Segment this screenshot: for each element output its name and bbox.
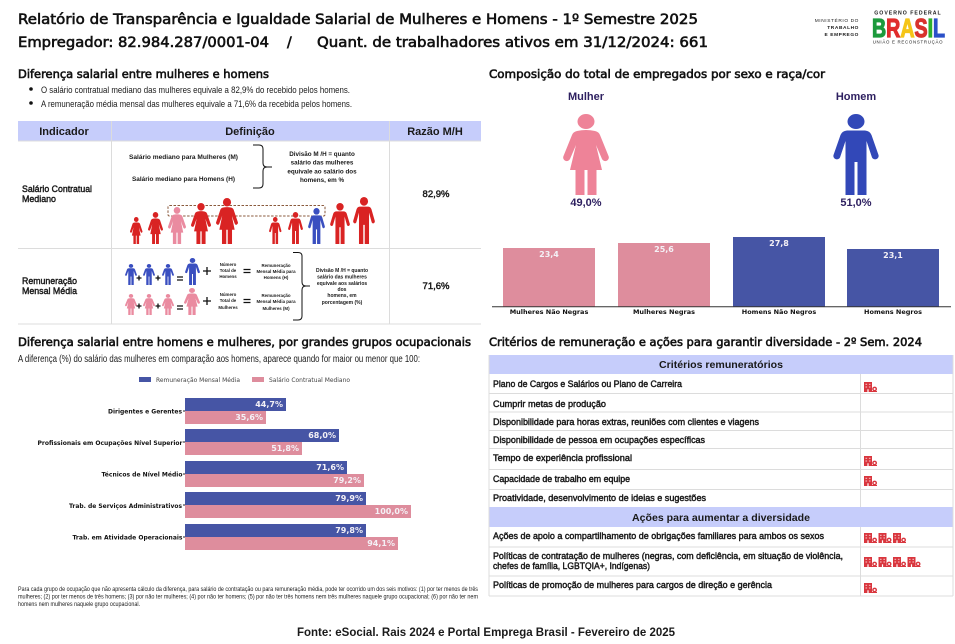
bar chart: grupos ocupacionais: [38, 398, 411, 550]
criteria rows: Proatividade, desenvolvimento de ideias e sugestões: [493, 493, 706, 503]
criteria rows: Cumprir metas de produção: [493, 399, 606, 409]
bar chart: grupos ocupacionais: 71,6%: [316, 463, 344, 472]
bar chart: sexo e raça: Mulheres Negras: [633, 308, 695, 316]
icon: homem 51,0%: [833, 91, 879, 209]
definition: remuneração homens: [125, 258, 296, 285]
definition: remuneração mulheres: [125, 288, 296, 315]
definition: divisão M/H: salário das mulheres: [317, 274, 367, 280]
title: Quant. de trabalhadores ativos em 31/12/2024: 661: [317, 35, 708, 51]
panel: composição: [489, 67, 951, 316]
heading: diferença salarial: Diferença salarial entre mulheres e homens: [18, 67, 269, 81]
heading: grupos ocupacionais: Diferença salarial entre homens e mulheres, por grandes grupos ocupacionais: [18, 335, 471, 349]
bar chart: grupos ocupacionais: 100,0%: [375, 507, 408, 516]
criteria rows: Disponibilidade de pessoa em ocupações específicas: [493, 435, 705, 445]
definition: salário mediano: salário das mulheres: [291, 160, 354, 166]
icon: homem 51,0%: Homem: [836, 91, 876, 103]
bar chart: grupos ocupacionais: Técnicos de Nível Médio: [102, 470, 183, 478]
panel: diferença salarial: [18, 67, 481, 324]
table header: Indicador: [39, 126, 89, 138]
row label: salário contratual mediano: Mediano: [22, 194, 56, 205]
source footer: Fonte: eSocial. Rais 2024 e Portal Emprega Brasil - Fevereiro de 2025: [297, 625, 675, 639]
bar chart: sexo e raça: 25,6: [654, 245, 674, 254]
value: 71,6%: 71,6%: [423, 281, 450, 292]
bar chart: sexo e raça: 23,1: [883, 251, 903, 260]
definition: divisão M/H: porcentagem (%): [322, 300, 363, 306]
definition: remuneração homens: Total de: [220, 268, 237, 273]
bar chart: grupos ocupacionais: 35,6%: [235, 413, 263, 422]
legend: [139, 376, 350, 384]
definition: remuneração homens: Homens (H): [264, 275, 289, 280]
definition: remuneração homens: Mensal Média para: [256, 269, 296, 274]
definition: salário mediano: homens, em %: [300, 177, 344, 184]
definition: remuneração homens: Homens: [219, 274, 237, 279]
definition: salário mediano: equivale ao salário dos: [287, 168, 357, 176]
bar chart: grupos ocupacionais: 51,8%: [271, 444, 299, 453]
definition: divisão M/H: equivale aos salários: [317, 281, 367, 287]
criteria rows: Disponibilidade para horas extras, reuniões com clientes e viagens: [493, 417, 759, 427]
bar chart: sexo e raça: [492, 237, 951, 316]
action rows: Ações de apoio a compartilhamento de obrigações familiares para ambos os sexos: [493, 531, 824, 541]
logo: ministério e governo federal: E EMPREGO: [825, 32, 859, 38]
definition: salário mediano: Salário mediano para Mulheres (M): [129, 154, 238, 161]
action rows: chefes de família, LGBTQIA+, Indígenas): [493, 561, 650, 571]
bullets: [29, 85, 352, 110]
panel: grupos ocupacionais: [18, 335, 478, 608]
icon: mulher 49,0%: 49,0%: [570, 197, 602, 209]
logo: ministério e governo federal: UNIÃO E RECONSTRUÇÃO: [873, 40, 943, 44]
bar chart: sexo e raça: Homens Negros: [864, 308, 922, 316]
criteria rows: Capacidade de trabalho em equipe: [493, 474, 630, 484]
bar chart: grupos ocupacionais: Trab. de Serviços Administrativos: [69, 502, 182, 510]
bullets: A remuneração média mensal das mulheres equivale a 71,6% da recebida pelos homens.: [41, 99, 352, 110]
title: Relatório de Transparência e Igualdade Salarial de Mulheres e Homens - 1º Semestre 2025: [18, 12, 698, 28]
table header: Definição: [225, 126, 275, 138]
criteria rows: Tempo de experiência profissional: [493, 453, 632, 463]
logo: ministério e governo federal: [815, 10, 945, 44]
action rows: [493, 531, 843, 590]
legend: Remuneração Mensal Média: [156, 376, 240, 384]
definition: remuneração mulheres: Mulheres: [218, 305, 238, 310]
legend: Salário Contratual Mediano: [269, 376, 350, 384]
title: /: [287, 35, 292, 51]
heading: composição: Composição do total de empregados por sexo e raça/cor: [489, 67, 825, 81]
footnote: [18, 587, 478, 608]
logo: ministério e governo federal: TRABALHO: [827, 25, 859, 31]
definition: divisão M/H: [293, 252, 368, 320]
table: indicadores: [18, 121, 481, 324]
table header: Razão M/H: [407, 126, 463, 138]
definition: remuneração homens: Remuneração: [261, 263, 291, 268]
criteria rows: [493, 379, 759, 503]
bar chart: grupos ocupacionais: Trab. em Atividade Operacionais: [72, 534, 183, 542]
bar chart: grupos ocupacionais: 68,0%: [308, 431, 336, 440]
definition: salário mediano: Divisão M /H = quanto: [289, 151, 355, 158]
icon: mulher 49,0%: Mulher: [568, 91, 605, 103]
definition: divisão M/H: Divisão M /H = quanto: [316, 268, 368, 274]
bar chart: sexo e raça: 23,4: [539, 250, 559, 259]
table header: [39, 126, 463, 138]
definition: remuneração mulheres: Mulheres (M): [262, 306, 290, 311]
criteria rows: Plano de Cargos e Salários ou Plano de Carreira: [493, 379, 682, 389]
bar chart: grupos ocupacionais: 79,2%: [333, 476, 361, 485]
row label: remuneração mensal média: Mensal Média: [22, 286, 78, 297]
row label: salário contratual mediano: Salário Contratual: [22, 184, 92, 195]
icon: mulher 49,0%: [563, 91, 609, 209]
footnote: mulheres; (2) por ter menos de três homens; (3) por não ter mulheres; (4) por não ter homens; (5) por não ter três homens nem três mulheres naquele grupo ocupacional; (6) por não ter nem: [18, 594, 478, 600]
bar chart: sexo e raça: 27,8: [769, 239, 789, 248]
definition: divisão M/H: dos: [338, 287, 347, 293]
action rows: Políticas de contratação de mulheres (negras, com deficiência, em situação de violência,: [493, 551, 843, 561]
definition: remuneração mulheres: Mensal Média para: [256, 299, 296, 304]
value: 82,9%: 82,9%: [423, 189, 450, 200]
panel: critérios e ações: [489, 335, 953, 596]
logo: ministério e governo federal: GOVERNO FEDERAL: [874, 10, 942, 16]
bar chart: grupos ocupacionais: Dirigentes e Gerentes: [108, 408, 182, 416]
table: critérios e ações: [489, 355, 953, 596]
row label: remuneração mensal média: [22, 276, 78, 297]
icons: empresas: [864, 382, 920, 593]
definition: salário mediano: [129, 145, 357, 188]
footnote: Para cada grupo de ocupação que não apresenta cálculo da diferença, para salário de contratação ou para remuneração média, pode ter ocorrido um dos seis motivos: (1) por ter menos de três: [18, 587, 478, 593]
bar chart: sexo e raça: Mulheres Não Negras: [510, 308, 588, 316]
title: Empregador: 82.984.287/0001-04: [18, 35, 269, 51]
bar chart: grupos ocupacionais: 79,8%: [335, 526, 363, 535]
icons: mediana de mulheres e homens: [130, 197, 375, 244]
row label: remuneração mensal média: Remuneração: [22, 276, 77, 287]
definition: remuneração homens: Número: [220, 262, 237, 267]
bar chart: sexo e raça: Homens Não Negros: [742, 308, 816, 316]
definition: remuneração mulheres: Remuneração: [261, 293, 291, 298]
section header: critérios remuneratórios: Critérios remuneratórios: [659, 359, 783, 371]
row label: salário contratual mediano: [22, 184, 92, 205]
heading: critérios: Critérios de remuneração e ações para garantir diversidade - 2º Sem. 2024: [489, 335, 922, 349]
footnote: homens nem mulheres naquele grupo ocupacional.: [18, 602, 140, 608]
bar chart: grupos ocupacionais: 79,9%: [335, 494, 363, 503]
definition: remuneração mulheres: Total de: [220, 298, 237, 303]
bar chart: grupos ocupacionais: Profissionais em Ocupações Nível Superior: [38, 439, 183, 447]
logo: ministério e governo federal: BRASIL: [872, 13, 945, 43]
action rows: Políticas de promoção de mulheres para cargos de direção e gerência: [493, 580, 772, 590]
section header: ações: Ações para aumentar a diversidade: [632, 512, 810, 524]
bar chart: grupos ocupacionais: 44,7%: [255, 400, 283, 409]
title: [18, 12, 708, 51]
definition: salário mediano: Salário mediano para Homens (H): [132, 176, 235, 183]
bar chart: grupos ocupacionais: 94,1%: [367, 539, 395, 548]
logo: ministério e governo federal: MINISTÉRIO DO: [815, 17, 859, 24]
bullets: O salário contratual mediano das mulheres equivale a 82,9% do recebido pelos homens.: [41, 85, 350, 96]
icon: homem 51,0%: 51,0%: [840, 197, 872, 209]
definition: divisão M/H: homens, em: [327, 293, 357, 299]
definition: remuneração mulheres: Número: [220, 292, 237, 297]
subtitle: A diferença (%) do salário das mulheres em comparação aos homens, aparece quando for maior ou menor que 100:: [18, 354, 420, 365]
